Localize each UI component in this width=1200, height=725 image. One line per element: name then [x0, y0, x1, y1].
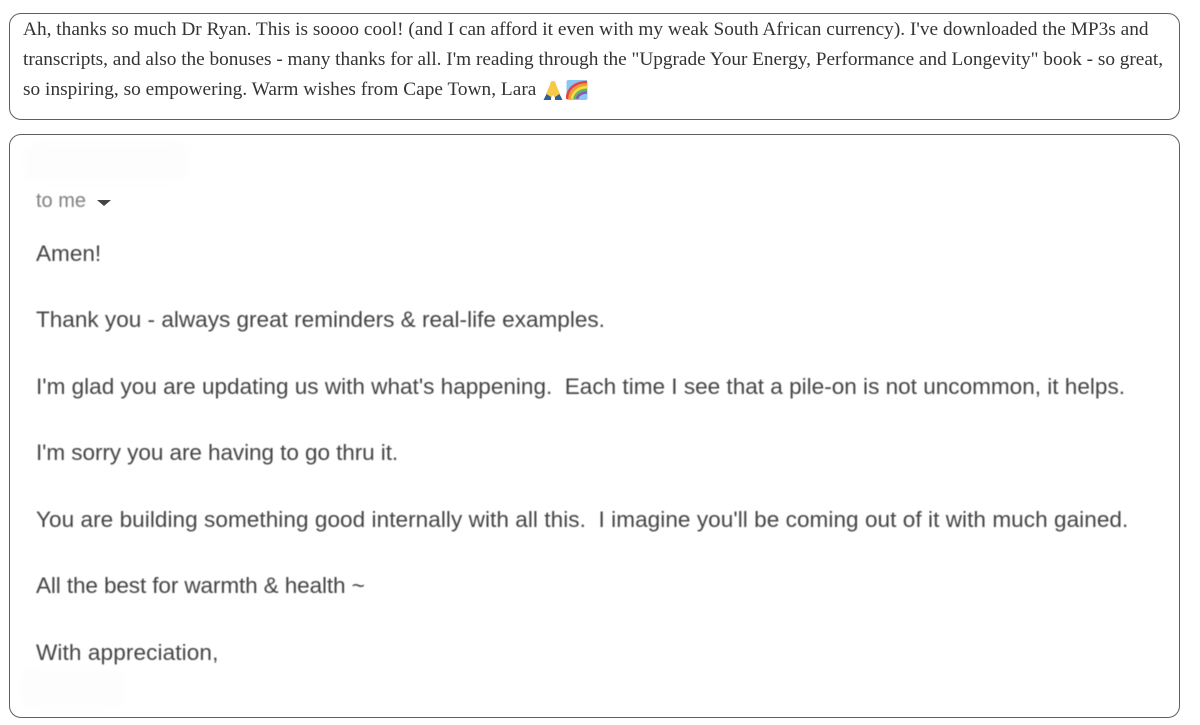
testimonial line 3: so inspiring, so empowering. Warm wishes from Cape Town, Lara [23, 79, 536, 100]
testimonial line 2: transcripts, and also the bonuses - many thanks for all. I'm reading through the "Upgrade Your Energy, Performance and Longevity" book - so great, [23, 49, 1163, 70]
testimonial line 1: Ah, thanks so much Dr Ryan. This is soooo cool! (and I can afford it even with my weak South African currency). I've downloaded the MP3s and [23, 19, 1149, 40]
email line: best wishes: All the best for warmth & health ~ [36, 573, 365, 598]
email line: sign-off: With appreciation, [36, 640, 218, 665]
email line: sorry: I'm sorry you are having to go thru it. [36, 440, 398, 465]
email line: thank you: Thank you - always great reminders & real-life examples. [36, 307, 605, 332]
email line: Amen: Amen! [36, 241, 101, 266]
email line: updating: I'm glad you are updating us with what's happening. Each time I see that a pile-on is not uncommon, it helps. [36, 374, 1125, 399]
recipient label: to me [36, 190, 86, 212]
email recipient line [36, 190, 111, 212]
redacted signature smudge [20, 668, 125, 708]
panel: email message [9, 134, 1180, 718]
icon: dropdown arrow [97, 200, 111, 206]
icon: praying hands emoji [544, 81, 562, 100]
email line: building: You are building something good internally with all this. I imagine you'll be coming out of it with much gained. [36, 507, 1128, 532]
panel: testimonial from Lara [9, 13, 1180, 120]
redacted sender smudge [24, 142, 190, 182]
icon: rainbow emoji [566, 80, 588, 100]
